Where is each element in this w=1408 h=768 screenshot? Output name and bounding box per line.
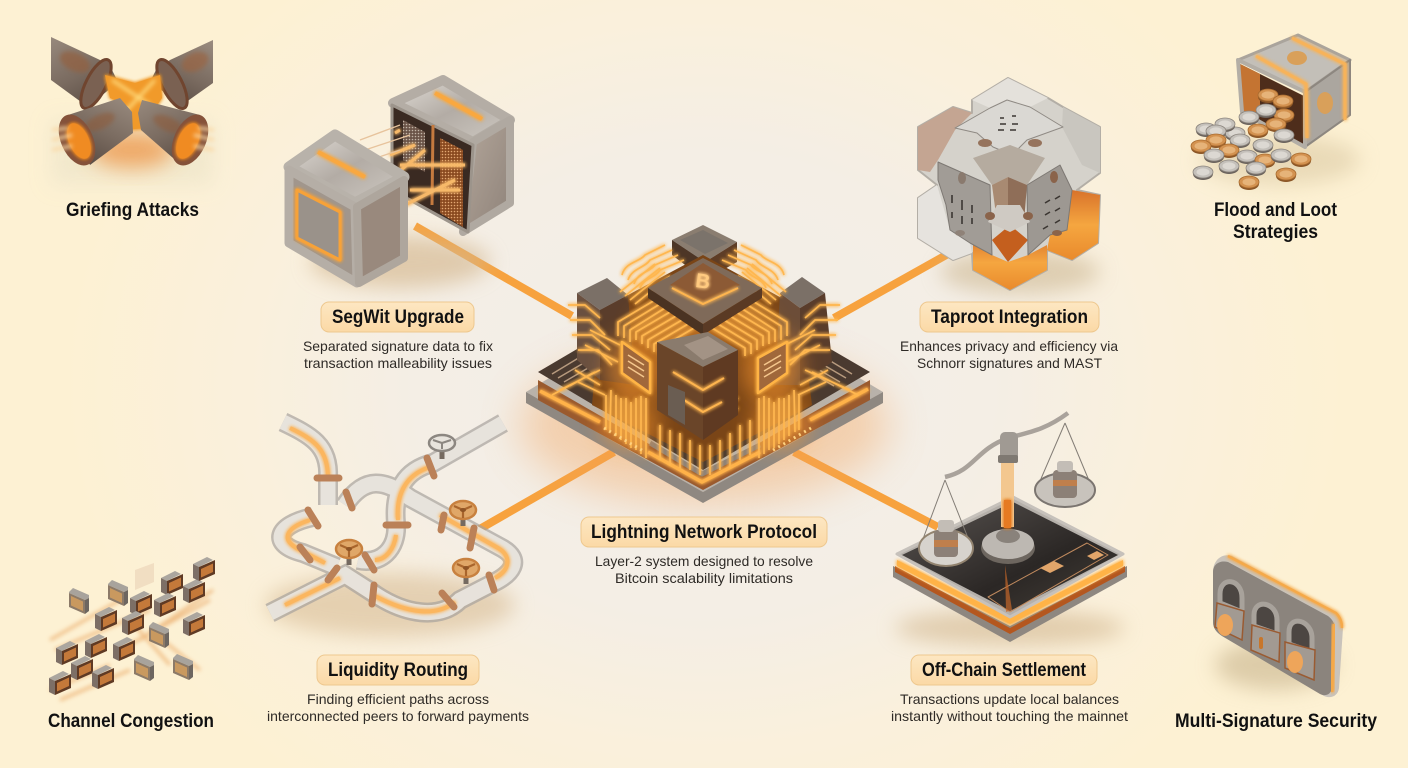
heading: segwit upgrade bbox=[321, 302, 474, 332]
label: flood and loot strategies: Strategies bbox=[1233, 222, 1318, 243]
text: segwit description: Separated signature data to fix bbox=[303, 338, 493, 354]
text: liquidity description bbox=[267, 691, 529, 724]
icon: central lightning network chip bbox=[519, 225, 889, 505]
panel: taproot integration bbox=[900, 78, 1118, 371]
panel: segwit upgrade bbox=[289, 80, 510, 371]
connector lines bbox=[415, 226, 948, 530]
label: flood and loot strategies bbox=[1214, 200, 1338, 243]
text: taproot description bbox=[900, 338, 1118, 371]
heading: taproot integration bbox=[920, 302, 1099, 332]
icon: off-chain balance scale bbox=[893, 413, 1127, 646]
heading: off-chain settlement bbox=[911, 655, 1097, 685]
label: multi-signature security: Multi-Signature Security bbox=[1175, 711, 1377, 732]
panel: liquidity routing bbox=[265, 422, 529, 724]
panel: off-chain settlement bbox=[891, 413, 1128, 724]
icon: segwit split cubes bbox=[289, 80, 510, 288]
glowing circuit traces bbox=[552, 245, 858, 475]
central top chip with bitcoin symbol: B bbox=[694, 270, 712, 294]
circuit towers bbox=[577, 225, 832, 462]
heading: lightning network protocol: Lightning Network Protocol bbox=[591, 522, 817, 543]
text: lightning description bbox=[595, 553, 813, 586]
icon: multi-signature padlocks bbox=[1213, 555, 1343, 697]
central top chip with bitcoin symbol bbox=[648, 258, 762, 335]
text: lightning description: Bitcoin scalability limitations bbox=[615, 570, 793, 586]
text: liquidity description: interconnected peers to forward payments bbox=[267, 708, 529, 724]
heading: liquidity routing: Liquidity Routing bbox=[328, 660, 468, 681]
text: lightning description: Layer-2 system designed to resolve bbox=[595, 553, 813, 569]
icon: channel congestion blocks bbox=[49, 557, 215, 700]
front tower bbox=[657, 332, 738, 440]
label: channel congestion: Channel Congestion bbox=[48, 711, 214, 732]
label: flood and loot strategies: Flood and Loot bbox=[1214, 200, 1338, 221]
solder dots along traces bbox=[604, 428, 811, 452]
heading: lightning network protocol bbox=[581, 517, 827, 547]
text: off-chain description bbox=[891, 691, 1128, 724]
icon: liquidity pipes and valves bbox=[265, 422, 515, 637]
icon: griefing attacks pipes bbox=[51, 37, 216, 185]
text: liquidity description: Finding efficient paths across bbox=[307, 691, 489, 707]
heading: segwit upgrade: SegWit Upgrade bbox=[332, 307, 464, 328]
heading: taproot integration: Taproot Integration bbox=[931, 307, 1088, 328]
label: griefing attacks: Griefing Attacks bbox=[66, 200, 199, 221]
text: taproot description: Enhances privacy and efficiency via bbox=[900, 338, 1118, 354]
text: segwit description: transaction malleability issues bbox=[304, 355, 492, 371]
text: taproot description: Schnorr signatures and MAST bbox=[917, 355, 1102, 371]
text: off-chain description: instantly without touching the mainnet bbox=[891, 708, 1128, 724]
text: segwit description bbox=[303, 338, 493, 371]
heading: liquidity routing bbox=[317, 655, 479, 685]
icon: flood and loot coin box bbox=[1191, 35, 1360, 190]
icon: taproot puzzle cube bbox=[918, 78, 1100, 294]
text: off-chain description: Transactions update local balances bbox=[900, 691, 1119, 707]
heading: off-chain settlement: Off-Chain Settlement bbox=[922, 660, 1087, 681]
glowing chip panels bbox=[622, 342, 787, 393]
